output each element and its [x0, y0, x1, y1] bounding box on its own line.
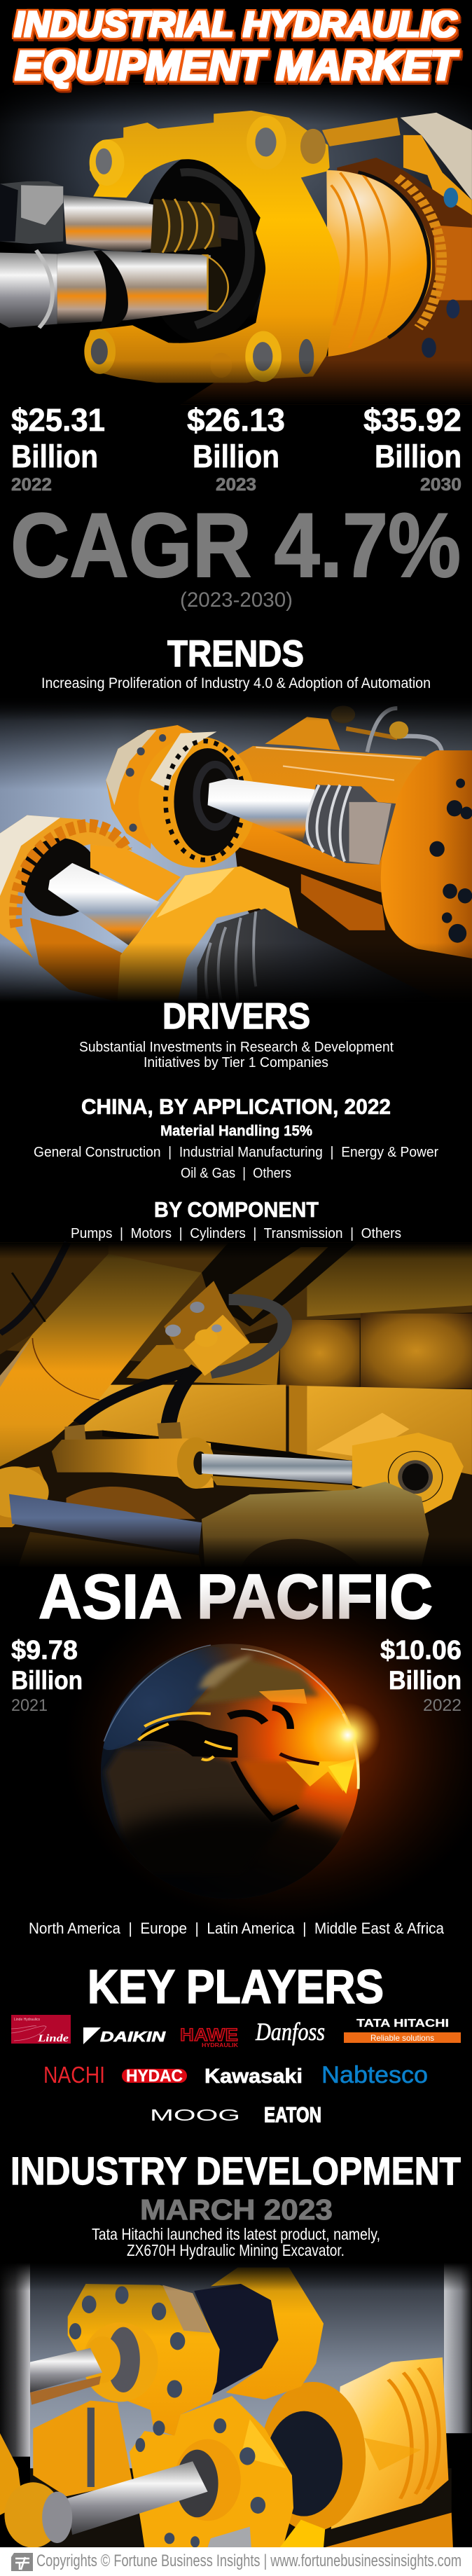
heading: China by application: CHINA, BY APPLICATION, 2022 — [81, 1094, 391, 1119]
logo: Linde: Linde Hydraulics — [14, 2018, 40, 2022]
trends text: Increasing Proliferation of Industry 4.0 & Adoption of Automation — [41, 675, 431, 691]
value 2030: Billion — [375, 439, 461, 474]
logo: Nabtesco: Nabtesco — [321, 2062, 428, 2088]
region list: North America | Europe | Latin America | Middle East & Africa — [29, 1920, 445, 1937]
component list: Pumps | Motors | Cylinders | Transmission | Others — [71, 1226, 401, 1241]
icon: Fortune Business Insights logo — [11, 2553, 33, 2571]
development date: MARCH 2023 — [140, 2193, 333, 2226]
logo: Moog: MOOG — [150, 2106, 240, 2124]
application list — [34, 1145, 438, 1181]
logo: Tata Hitachi — [344, 2018, 461, 2043]
value 2030: 2030 — [420, 475, 461, 495]
image: excavator arm cylinder — [0, 1242, 472, 1568]
highlighted application: Material Handling 15% — [160, 1123, 312, 1139]
logo: Tata Hitachi: Reliable solutions — [370, 2033, 434, 2043]
hero image: hydraulic cylinder — [0, 83, 472, 404]
Asia Pacific value 2022: Billion — [389, 1666, 461, 1695]
value 2030: $35.92 — [363, 402, 461, 438]
logo: Eaton: EATON — [264, 2102, 321, 2127]
logo: Daikin — [83, 2027, 166, 2045]
development text: ZX670H Hydraulic Mining Excavator. — [127, 2241, 345, 2259]
image: hydraulic winch assembly — [0, 2263, 472, 2550]
footer bar — [0, 2547, 472, 2576]
image: twin orange cylinders — [0, 696, 472, 1003]
value 2023: 2023 — [216, 475, 256, 495]
logo: Linde — [11, 2015, 71, 2044]
Asia Pacific value 2021: $9.78 — [11, 1636, 78, 1665]
Asia Pacific value 2021: 2021 — [11, 1696, 48, 1715]
title: EQUIPMENT MARKET — [15, 43, 459, 89]
value 2022: Billion — [11, 439, 98, 474]
drivers text: Substantial Investments in Research & Development — [79, 1040, 394, 1055]
value 2023: $26.13 — [187, 402, 285, 438]
heading: trends: TRENDS — [167, 633, 304, 675]
logo: Kawasaki: Kawasaki — [204, 2065, 303, 2088]
heading: key players: KEY PLAYERS — [88, 1960, 384, 2013]
logo: Daikin: DAIKIN — [100, 2030, 166, 2045]
title: INDUSTRIAL HYDRAULIC — [14, 4, 457, 44]
Asia Pacific value 2021: Billion — [11, 1666, 83, 1695]
value 2022: $25.31 — [11, 402, 105, 438]
value 2023: Billion — [193, 439, 279, 474]
application list: Oil & Gas | Others — [181, 1166, 291, 1181]
market values — [11, 402, 461, 495]
Asia Pacific value 2022 — [380, 1636, 461, 1715]
Asia Pacific value 2022: 2022 — [423, 1696, 461, 1715]
Asia Pacific value 2021 — [11, 1636, 83, 1715]
logo: Tata Hitachi: TATA HITACHI — [356, 2018, 449, 2030]
value 2030 — [363, 402, 461, 495]
company logos — [11, 2015, 461, 2127]
value 2022: 2022 — [11, 475, 52, 495]
logo: Hawe Hydraulik: HYDRAULIK — [202, 2042, 238, 2048]
logo: Hawe Hydraulik: HAWE — [180, 2025, 238, 2045]
logo: Nachi: NACHI — [43, 2062, 105, 2088]
heading: by component: BY COMPONENT — [154, 1197, 319, 1222]
drivers text: Initiatives by Tier 1 Companies — [144, 1055, 328, 1070]
application list: General Construction | Industrial Manufacturing | Energy & Power — [34, 1145, 438, 1160]
title — [14, 4, 459, 89]
logo: Hydac: HYDAC — [126, 2067, 183, 2086]
value 2023 — [187, 402, 285, 495]
heading: Asia Pacific: ASIA PACIFIC — [39, 1562, 433, 1632]
globe illustration — [90, 1579, 471, 1903]
heading: drivers: DRIVERS — [162, 996, 310, 1037]
development text: Tata Hitachi launched its latest product, namely, — [92, 2225, 380, 2243]
value 2022 — [11, 402, 105, 495]
drivers text — [79, 1040, 394, 1070]
logo: Danfoss: Danfoss — [255, 2018, 325, 2046]
development text — [92, 2225, 380, 2259]
logo: Linde: Linde — [37, 2033, 69, 2044]
Asia Pacific value 2022: $10.06 — [380, 1636, 461, 1665]
CAGR period: (2023-2030) — [180, 588, 293, 612]
